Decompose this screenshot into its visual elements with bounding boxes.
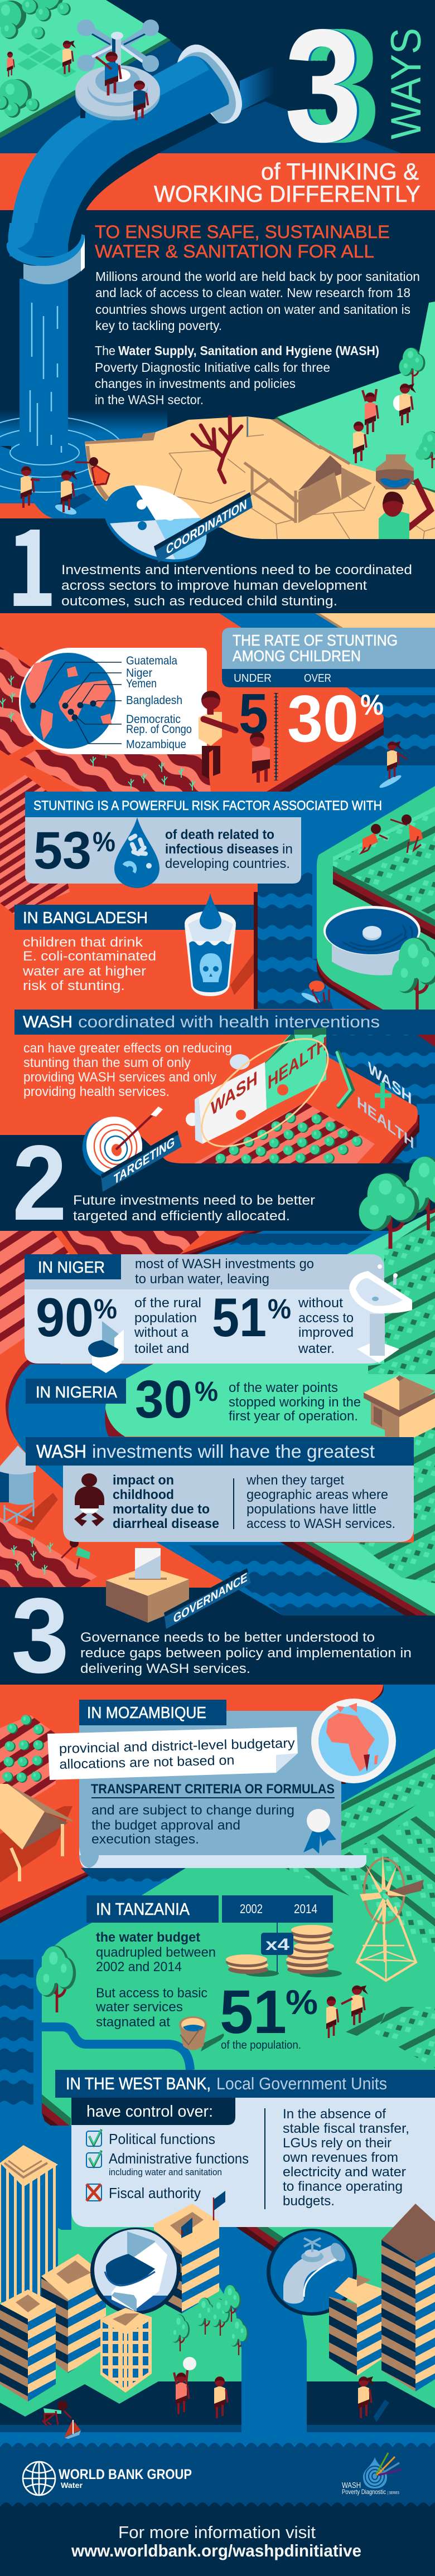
fiscal transfer text — [283, 2107, 409, 2209]
building: block behind lens — [162, 2208, 219, 2313]
intro text — [135, 1257, 314, 1287]
tap handle — [77, 20, 159, 72]
country labels: Mozambique — [126, 738, 186, 751]
checklist — [86, 2129, 249, 2201]
checklist: including water and sanitation — [109, 2167, 222, 2177]
number 2: 2 — [12, 1123, 67, 1243]
leader lines and dots — [33, 662, 122, 744]
year labels: 2014 — [294, 1901, 317, 1916]
child being measured — [250, 732, 270, 783]
person in field — [61, 1539, 90, 1569]
height ruler — [276, 693, 277, 780]
heading: to ensure safe, sustainable water and sanitation — [95, 222, 390, 261]
footer: logos band — [0, 2443, 435, 2507]
text: improved water: water. — [298, 1341, 335, 1356]
risk text: infectious diseases — [165, 842, 279, 857]
text: improved water: improved — [298, 1325, 354, 1340]
access text: stagnated at — [96, 2015, 170, 2030]
body text: E. coli-contaminated — [23, 949, 156, 964]
title line: of THINKING & — [261, 158, 419, 185]
icon: baby — [74, 1473, 104, 1526]
panel: stunting risk factor — [25, 792, 382, 888]
white paper note: allocations are not based on — [59, 1753, 235, 1772]
lens: faucet — [267, 2229, 357, 2316]
people by the pool — [21, 457, 109, 517]
heading: coordinated with health interventions — [78, 1013, 380, 1031]
puzzle pieces WASH and HEALTH: WASH — [211, 1067, 258, 1120]
icon: sink — [349, 1264, 412, 1363]
water tank — [323, 906, 420, 976]
risk text — [165, 827, 293, 871]
tap base — [75, 65, 160, 120]
WASH Poverty Diagnostic logo: Poverty Diagnostic — [342, 2488, 386, 2496]
intro text: and lack of access to clean water. New research from 18 — [95, 285, 410, 300]
stat 51 percent: 51 — [220, 1978, 287, 2046]
access text: water services — [95, 2000, 183, 2015]
country labels: Yemen — [126, 677, 157, 690]
icon: ballot box — [106, 1548, 189, 1623]
WASH Poverty Diagnostic logo: WASH — [342, 2481, 361, 2490]
World Bank Group logo: WORLD BANK GROUP — [59, 2467, 192, 2482]
section 3 text: reduce gaps between policy and implementation in — [80, 1646, 412, 1661]
fiscal transfer text: In the absence of — [283, 2107, 386, 2122]
year labels: 2002 — [240, 1901, 263, 1916]
adult measuring child — [199, 691, 235, 779]
intro text: most of WASH investments go — [135, 1257, 314, 1272]
heading: IN THE WEST BANK, — [66, 2074, 211, 2093]
panel heading — [233, 632, 398, 664]
intro text: Water Supply, Sanitation and Hygiene (WASH) — [118, 343, 379, 358]
text: geographic targeting: populations have little — [246, 1502, 376, 1517]
body text: risk of stunting. — [23, 978, 125, 993]
text: rural population: toilet and — [134, 1341, 189, 1356]
fiscal transfer text: electricity and water — [283, 2165, 406, 2180]
title number 3: 3 — [287, 0, 364, 176]
stat 53 percent: % — [93, 826, 115, 857]
body text: and are subject to change during — [91, 1803, 294, 1818]
section 1 text: Investments and interventions need to be coordinated — [61, 562, 412, 578]
body text — [23, 1041, 232, 1099]
panel: in Bangladesh — [14, 893, 254, 996]
country labels: Guatemala — [126, 654, 177, 667]
title number 3: 3 — [303, 0, 380, 176]
fiscal transfer text: to finance operating — [283, 2179, 403, 2194]
white paper note: provincial and district-level budgetary — [59, 1736, 295, 1757]
World Bank Group logo — [23, 2462, 192, 2495]
footer: more information: www.worldbank.org/washpdinitiative — [71, 2541, 361, 2560]
heading: IN TANZANIA — [96, 1899, 190, 1919]
icon: water drop with bacteria — [114, 817, 160, 888]
section 3 text: Governance needs to be better understood to — [80, 1630, 375, 1645]
section 1 text: across sectors to improve human development — [61, 578, 367, 593]
icon: house — [364, 1375, 435, 1445]
text: geographic targeting — [246, 1473, 395, 1531]
budget text: quadrupled between — [96, 1945, 216, 1960]
text: geographic targeting: when they target — [246, 1473, 344, 1488]
lower background — [0, 1685, 435, 2432]
stat 30 percent: % — [195, 1376, 218, 1407]
under and over labels — [234, 672, 331, 685]
under and over labels: UNDER — [234, 672, 272, 685]
text: childhood mortality: mortality due to — [113, 1502, 210, 1517]
icon: bucket — [179, 2016, 224, 2051]
heading: STUNTING IS A POWERFUL RISK FACTOR ASSOCIATED WITH — [33, 798, 382, 813]
panel: rate of stunting among children — [199, 628, 435, 783]
stat 30 percent: 30 — [135, 1370, 192, 1429]
heading: Local Government Units — [216, 2074, 387, 2093]
text: improved water: access to — [298, 1311, 354, 1326]
governance banner: GOVERNANCE — [173, 1569, 247, 1626]
section 1 band — [0, 518, 435, 613]
title line — [154, 158, 420, 207]
ground, water and people at the bottom — [0, 2341, 435, 2448]
body text: stopped working in the — [229, 1395, 361, 1410]
number 1: 1 — [7, 483, 57, 637]
World Bank Group logo: Water — [61, 2481, 83, 2490]
text: geographic targeting: geographic areas where — [246, 1487, 388, 1502]
building: striped tower right — [381, 2240, 435, 2391]
fiscal transfer text: budgets. — [283, 2194, 335, 2209]
budget text: 2002 and 2014 — [96, 1959, 182, 1975]
water tower — [0, 1445, 58, 1530]
icon: award rosette — [303, 1809, 336, 1854]
body text: children that drink — [23, 935, 143, 950]
field with crops and water tank — [301, 786, 435, 1017]
risk text: of death related to — [165, 827, 274, 842]
icon: Africa globe — [311, 1699, 396, 1783]
year labels — [240, 1901, 317, 1916]
left crop field with plants — [0, 1715, 56, 1806]
intro text: countries shows urgent action on water and sanitation is — [95, 302, 410, 317]
building: striped block — [0, 2289, 56, 2402]
heading: IN MOZAMBIQUE — [87, 1704, 206, 1722]
hut — [0, 1784, 72, 1883]
small figure in the water — [301, 981, 329, 1005]
text: childhood mortality: impact on — [113, 1473, 174, 1488]
left crop fields — [0, 647, 211, 914]
icon: glass with skull — [185, 893, 254, 996]
country labels: Bangladesh — [126, 694, 182, 707]
section 1 text — [61, 562, 412, 609]
girl on water — [378, 741, 407, 790]
x4 label: x4 — [265, 1935, 289, 1954]
heading: WASH — [36, 1441, 86, 1462]
building: glass block — [100, 2308, 152, 2393]
intro text: Millions around the world are held back by poor sanitation — [95, 269, 420, 284]
stat 51 percent: % — [286, 1983, 318, 2022]
have control over tab: have control over: — [86, 2103, 213, 2121]
panel: in Tanzania — [86, 1895, 385, 2051]
title number 3: 3 — [284, 0, 362, 176]
windmill — [357, 1854, 424, 1981]
under and over labels: OVER — [304, 672, 331, 685]
access text — [95, 1986, 207, 2030]
woman with water pot — [376, 454, 431, 539]
person and sailboat — [42, 2400, 81, 2439]
body text: providing WASH services and only — [23, 1070, 216, 1085]
WASH plus HEALTH stacked text: WASH — [368, 1058, 412, 1108]
pipe flange — [177, 45, 242, 124]
country labels: Democratic — [126, 713, 181, 726]
title number 3: 3 — [289, 0, 367, 176]
panel heading: THE RATE OF STUNTING — [233, 632, 398, 649]
stat 90 percent: 90 — [36, 1287, 94, 1348]
white paper note — [47, 1727, 298, 1780]
footer: more information: For more information visit — [118, 2522, 316, 2542]
checklist: Administrative functions — [109, 2150, 249, 2167]
panel: globe of study countries — [19, 648, 207, 754]
children at the bottom — [174, 2357, 389, 2422]
country labels — [126, 654, 192, 751]
body text — [22, 935, 156, 993]
heading: to ensure safe, sustainable water and sanitation: WATER & SANITATION FOR ALL — [95, 241, 374, 261]
text: childhood mortality — [113, 1473, 219, 1531]
section 3 text: delivering WASH services. — [80, 1661, 250, 1676]
section 2 text — [73, 1193, 315, 1224]
transparent criteria text: TRANSPARENT CRITERIA OR FORMULAS — [91, 1782, 335, 1797]
icon: toilet — [88, 1321, 124, 1373]
country labels: Rep. of Congo — [126, 723, 192, 736]
body text: the budget approval and — [91, 1818, 240, 1833]
body text: water are at higher — [22, 964, 146, 979]
buildings, river and lenses — [0, 2126, 435, 2417]
intro text: in the WASH sector. — [95, 392, 204, 407]
budget text: the water budget — [96, 1930, 200, 1945]
people around tap — [7, 41, 148, 120]
section 2 text: Future investments need to be better — [73, 1193, 315, 1208]
orange and blue background, stunting area — [0, 613, 435, 1135]
puzzle pieces WASH and HEALTH: HEALTH — [268, 1032, 327, 1094]
text: rural population: population — [134, 1311, 197, 1326]
section 3 band — [0, 1587, 435, 1685]
heading: to ensure safe, sustainable water and sanitation: TO ENSURE SAFE, SUSTAINABLE — [95, 222, 390, 242]
section 2 text: targeted and efficiently allocated. — [73, 1209, 290, 1224]
coordination banner: COORDINATION — [166, 496, 247, 558]
section 3 text — [80, 1630, 412, 1676]
intro text — [95, 269, 420, 407]
section 2 band — [0, 1135, 435, 1231]
puzzle pieces WASH and HEALTH — [184, 1019, 352, 1166]
targeting banner: TARGETING — [114, 1134, 175, 1188]
panel heading: AMONG CHILDREN — [233, 647, 361, 664]
panel: in Mozambique — [47, 1699, 396, 1868]
WASH Poverty Diagnostic logo — [342, 2453, 402, 2496]
x4 label — [261, 1933, 293, 1955]
body text: stunting than the sum of only — [23, 1055, 191, 1070]
title number 3: 3 — [294, 0, 371, 176]
body text — [229, 1380, 361, 1424]
group of trees — [170, 2284, 248, 2355]
heading: IN BANGLADESH — [23, 909, 148, 927]
lens: toilet — [90, 2228, 181, 2318]
intro text: changes in investments and policies — [95, 376, 296, 391]
stat 30 percent: % — [360, 689, 384, 721]
checklist: Fiscal authority — [109, 2185, 201, 2201]
scroll bottom — [79, 1845, 366, 1868]
target with arrow — [77, 1107, 163, 1183]
text: geographic targeting: access to WASH services. — [246, 1516, 395, 1531]
text: rural population: of the rural — [134, 1296, 201, 1311]
farmers on the field — [361, 814, 423, 853]
stat 51 percent: % — [268, 1293, 291, 1325]
panel: WASH investments will have the greatest — [26, 1437, 414, 1542]
two children — [326, 1985, 385, 2038]
building: roof block — [41, 2254, 106, 2373]
blue pipe — [9, 56, 229, 245]
pipe outlet and water column — [0, 223, 167, 518]
fiscal transfer text: stable fiscal transfer, — [283, 2121, 409, 2136]
number 3: 3 — [11, 1575, 69, 1695]
heading: WASH — [23, 1013, 72, 1031]
heading: IN NIGERIA — [36, 1384, 118, 1401]
intro text: key to tackling poverty. — [95, 318, 222, 333]
text: rural population — [134, 1296, 201, 1356]
stat 53 percent: 53 — [33, 821, 91, 880]
budget text — [96, 1930, 216, 1975]
coin stacks — [226, 1923, 342, 1977]
building roof, right — [381, 2204, 435, 2262]
body text: can have greater effects on reducing — [23, 1041, 232, 1056]
body text: providing health services. — [23, 1084, 170, 1099]
body text: first year of operation. — [229, 1409, 358, 1424]
dead tree — [192, 417, 241, 482]
shelf field with rows of plants — [194, 1102, 375, 1165]
checklist: Political functions — [109, 2131, 215, 2147]
people on green land — [353, 348, 435, 468]
text: childhood mortality: diarrheal disease — [113, 1516, 219, 1531]
intro text: Poverty Diagnostic Initiative calls for three — [95, 360, 330, 375]
WASH plus HEALTH stacked text — [357, 1058, 414, 1153]
body text — [91, 1803, 294, 1847]
fiscal transfer text: LGUs rely on their — [283, 2136, 392, 2151]
text: rural population: without a — [134, 1325, 189, 1340]
title number 3: 3 — [298, 0, 376, 176]
text: childhood mortality: childhood — [113, 1487, 174, 1502]
body text: execution stages. — [91, 1832, 199, 1847]
cracked earth with hut and green land — [21, 302, 435, 539]
building: tall glass tower — [0, 2145, 58, 2302]
text: improved water — [298, 1296, 354, 1356]
puzzle disc icon — [105, 485, 206, 562]
trees over the section 2 band — [359, 1156, 435, 1249]
WASH plus HEALTH stacked text: HEALTH — [357, 1093, 414, 1153]
risk text: in — [282, 842, 293, 857]
WASH Poverty Diagnostic logo: | SERIES — [388, 2491, 399, 2495]
panel: in Niger — [25, 1254, 412, 1373]
title word WAYS: WAYS — [383, 28, 430, 139]
stat 90 percent: % — [94, 1293, 117, 1325]
heading: IN NIGER — [38, 1259, 105, 1277]
hero: tap and pipe illustration — [0, 0, 435, 245]
footer: more information — [71, 2522, 361, 2560]
number 5: 5 — [239, 683, 268, 745]
of the population: of the population. — [221, 2039, 301, 2051]
panel: WASH coordinated with health — [14, 1010, 435, 1099]
text: improved water: without — [298, 1296, 343, 1311]
globe — [21, 653, 115, 749]
tree — [36, 1946, 76, 2012]
building: striped block right — [329, 2274, 381, 2376]
stat 51 percent — [220, 1978, 318, 2046]
intro text: The — [95, 343, 115, 358]
waves behind WASH and health platform — [0, 1009, 435, 1171]
risk text: developing countries. — [165, 856, 290, 871]
panel: West Bank local government units — [55, 2070, 435, 2262]
intro text: to urban water, leaving — [135, 1272, 269, 1287]
hut — [244, 446, 372, 523]
fiscal transfer text: own revenues from — [283, 2150, 398, 2165]
body text: of the water points — [229, 1380, 338, 1395]
access text: But access to basic — [96, 1986, 207, 2001]
building roof with flag — [154, 2191, 225, 2252]
heading: investments will have the greatest — [92, 1441, 375, 1462]
stat 30 percent: 30 — [287, 682, 359, 756]
tree beside tank — [392, 938, 435, 1010]
title line: WORKING DIFFERENTLY — [154, 181, 420, 207]
section 1 text: outcomes, such as reduced child stunting. — [61, 594, 337, 609]
stat 51 percent: 51 — [212, 1287, 267, 1348]
middle background below section 2 — [0, 1210, 435, 1616]
country labels: Niger — [126, 667, 152, 680]
panel: in Nigeria — [26, 1370, 435, 1445]
heading — [66, 2074, 387, 2093]
